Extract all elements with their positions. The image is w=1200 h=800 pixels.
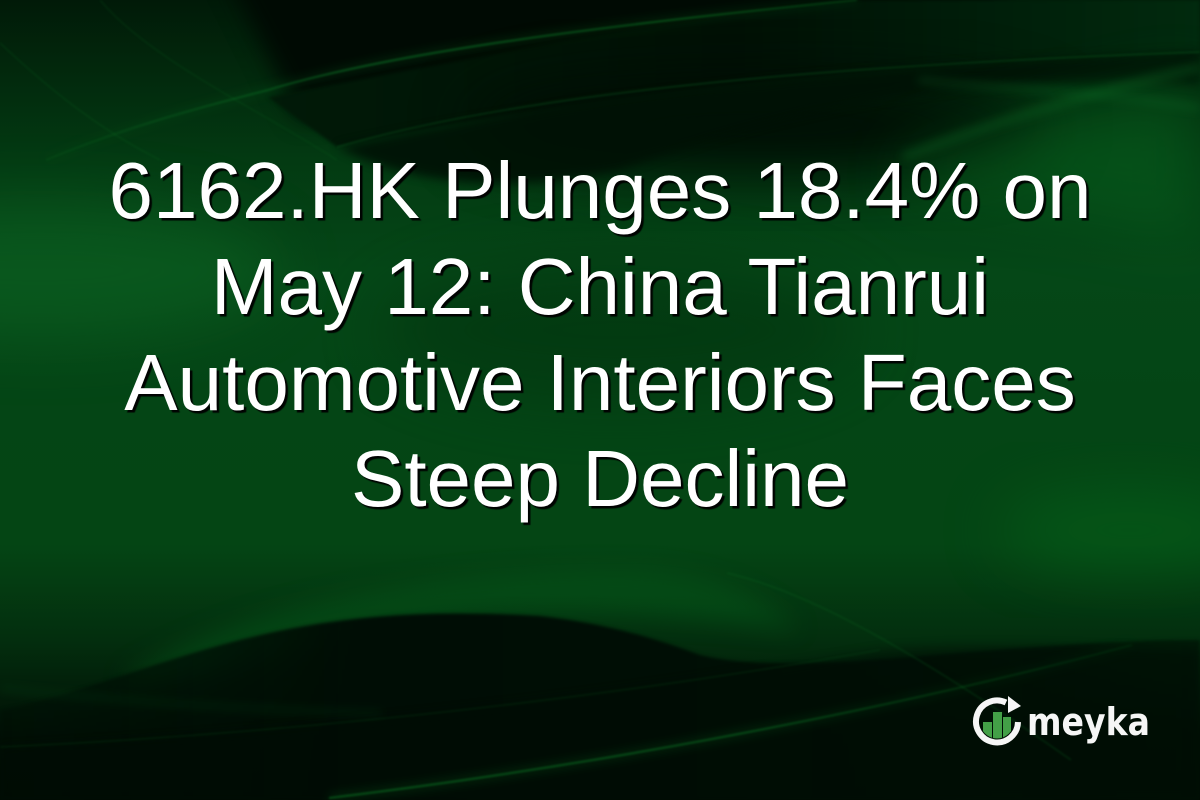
- icon: circular arrow with green bars: [976, 696, 1021, 742]
- logo: meyka: [972, 696, 1150, 746]
- title: May 12: China Tianrui: [211, 242, 989, 331]
- top dark masses: [220, 0, 1000, 120]
- lower light band: [120, 570, 800, 680]
- title: [109, 146, 1091, 526]
- title: Steep Decline: [351, 434, 849, 523]
- bright mid-left and right glow: [0, 200, 280, 340]
- title: Automotive Interiors Faces: [124, 338, 1076, 427]
- lower dark dome: [0, 614, 1200, 800]
- title: 6162.HK Plunges 18.4% on: [109, 146, 1091, 235]
